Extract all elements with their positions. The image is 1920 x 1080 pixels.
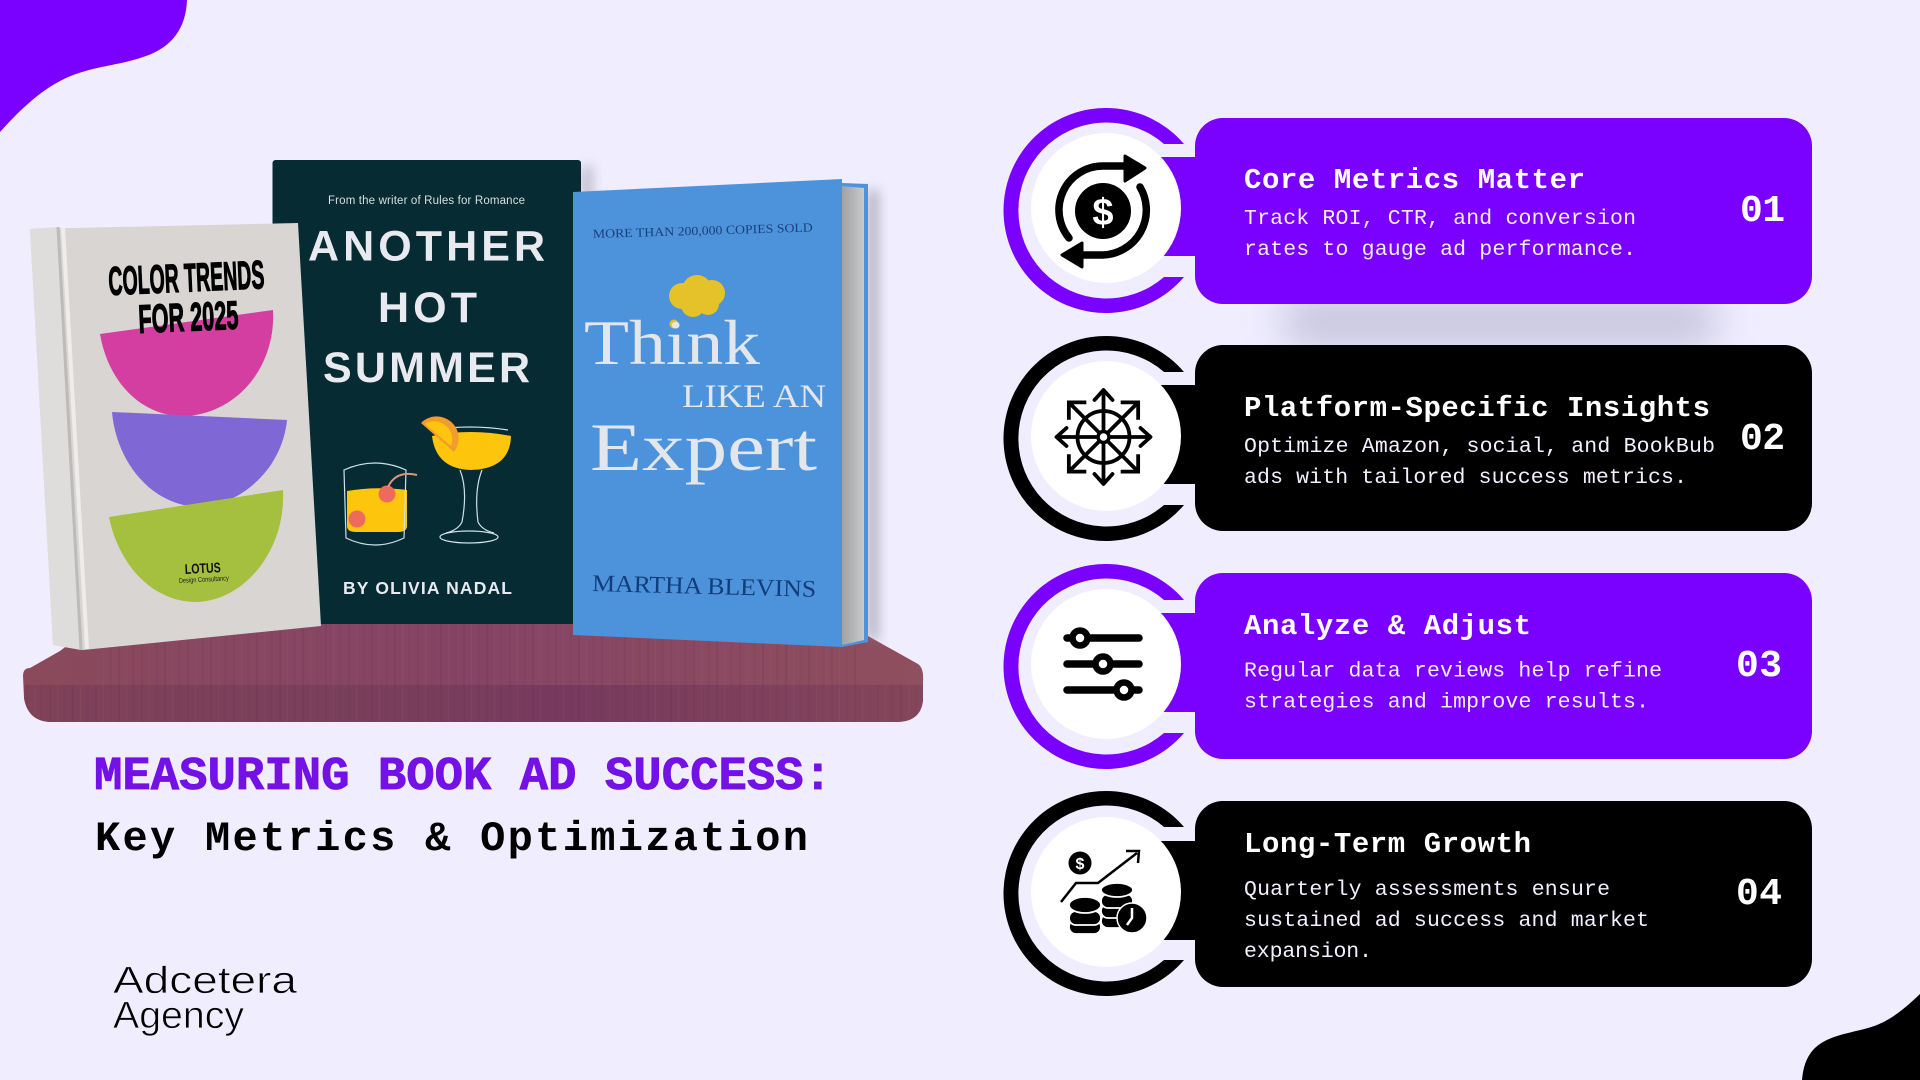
- cover shape: purple bowl: [112, 412, 287, 507]
- icon: coins, growth arrow and clock: [1061, 851, 1147, 934]
- description: Quarterly assessments ensure: [1244, 878, 1610, 902]
- card: [1195, 345, 1812, 531]
- description: Optimize Amazon, social, and BookBub: [1244, 435, 1715, 459]
- connector tab: [1150, 613, 1200, 712]
- white icon disc: [1031, 133, 1181, 283]
- book: Another Hot Summer: HOT: [378, 284, 477, 332]
- book: Think Like an Expert: [573, 179, 878, 647]
- description line 2: sustained ad success and market: [1244, 909, 1649, 933]
- subheading: Key Metrics & Optimization: [95, 815, 808, 863]
- ring: [1004, 791, 1184, 996]
- description line 2: rates to gauge ad performance.: [1244, 238, 1636, 262]
- connector tab: [1150, 841, 1200, 940]
- number: 01: [1740, 190, 1785, 233]
- book: Think Like an Expert: MARTHA BLEVINS: [592, 571, 816, 603]
- icon: thought cloud: [669, 275, 725, 328]
- connector tab: [1150, 157, 1200, 256]
- book: Color Trends for 2025: FOR 2025: [137, 294, 239, 342]
- book: Color Trends for 2025: LOTUS: [184, 559, 221, 577]
- number: 03: [1736, 645, 1782, 688]
- book: Another Hot Summer: SUMMER: [323, 344, 530, 392]
- decorative corner blob: top left: [0, 0, 187, 132]
- ring: [1004, 564, 1184, 769]
- title: Platform-Specific Insights: [1244, 392, 1710, 425]
- description line 2: ads with tailored success metrics.: [1244, 466, 1687, 490]
- number: 04: [1736, 873, 1782, 916]
- number: 02: [1740, 418, 1785, 461]
- decorative corner blob: bottom right: [1802, 994, 1920, 1080]
- book: Color Trends for 2025: Design Consultancy: [179, 575, 229, 585]
- step 04: Long-Term Growth: [1004, 791, 1812, 996]
- book: Color Trends for 2025: COLOR TRENDS: [107, 253, 265, 304]
- white icon disc: [1031, 361, 1181, 511]
- description: Regular data reviews help refine: [1244, 660, 1662, 684]
- card shadow: [1285, 296, 1715, 346]
- shelf: [23, 620, 923, 722]
- book: Think Like an Expert: Expert: [590, 409, 817, 485]
- book: Think Like an Expert: Think: [584, 307, 760, 378]
- description: Track ROI, CTR, and conversion: [1244, 207, 1636, 231]
- main heading: MEASURING BOOK AD SUCCESS:: [94, 751, 832, 804]
- icon: dollar with circular arrows: $: [1092, 192, 1114, 234]
- logo: Adcetera Agency: Adcetera: [113, 960, 298, 1002]
- illustration: cocktail coupe: [421, 416, 511, 543]
- description line 3: expansion.: [1244, 940, 1372, 964]
- ring: [1004, 336, 1184, 541]
- icon: wheel with outward arrows: [1056, 390, 1150, 484]
- step 02: Platform-Specific Insights: [1004, 336, 1812, 541]
- book: Another Hot Summer: ANOTHER: [308, 222, 545, 270]
- book: Color Trends for 2025: [30, 223, 321, 650]
- book: Another Hot Summer: BY OLIVIA NADAL: [343, 578, 512, 598]
- book: Think Like an Expert: LIKE AN: [682, 379, 826, 415]
- book display illustration: [23, 160, 923, 722]
- step 03: Analyze & Adjust: [1004, 564, 1812, 769]
- white icon disc: [1031, 589, 1181, 739]
- card: [1195, 573, 1812, 759]
- cover shape: green bowl: [109, 490, 283, 602]
- cover shape: pink bowl: [100, 310, 273, 416]
- book: Think Like an Expert: MORE THAN 200,000 COPIES SOLD: [593, 220, 813, 241]
- logo: Adcetera Agency: [113, 960, 298, 1037]
- icon: sliders: [1067, 630, 1139, 698]
- title: Core Metrics Matter: [1244, 164, 1585, 197]
- icon: coins, growth arrow and clock: $: [1076, 856, 1085, 873]
- white icon disc: [1031, 817, 1181, 967]
- book: Another Hot Summer: [272, 160, 592, 624]
- icon: dollar with circular arrows: [1059, 156, 1146, 267]
- ring: [1004, 108, 1184, 313]
- illustration: old fashioned glass: [344, 463, 417, 545]
- title: Analyze & Adjust: [1244, 610, 1531, 643]
- step 01: Core Metrics Matter: [1004, 108, 1812, 313]
- card: [1195, 118, 1812, 304]
- logo: Adcetera Agency: Agency: [113, 995, 244, 1037]
- connector tab: [1150, 385, 1200, 484]
- description line 2: strategies and improve results.: [1244, 690, 1649, 714]
- card: [1195, 801, 1812, 987]
- book: Another Hot Summer: From the writer of Rules for Romance: [328, 195, 525, 207]
- title: Long-Term Growth: [1244, 828, 1531, 861]
